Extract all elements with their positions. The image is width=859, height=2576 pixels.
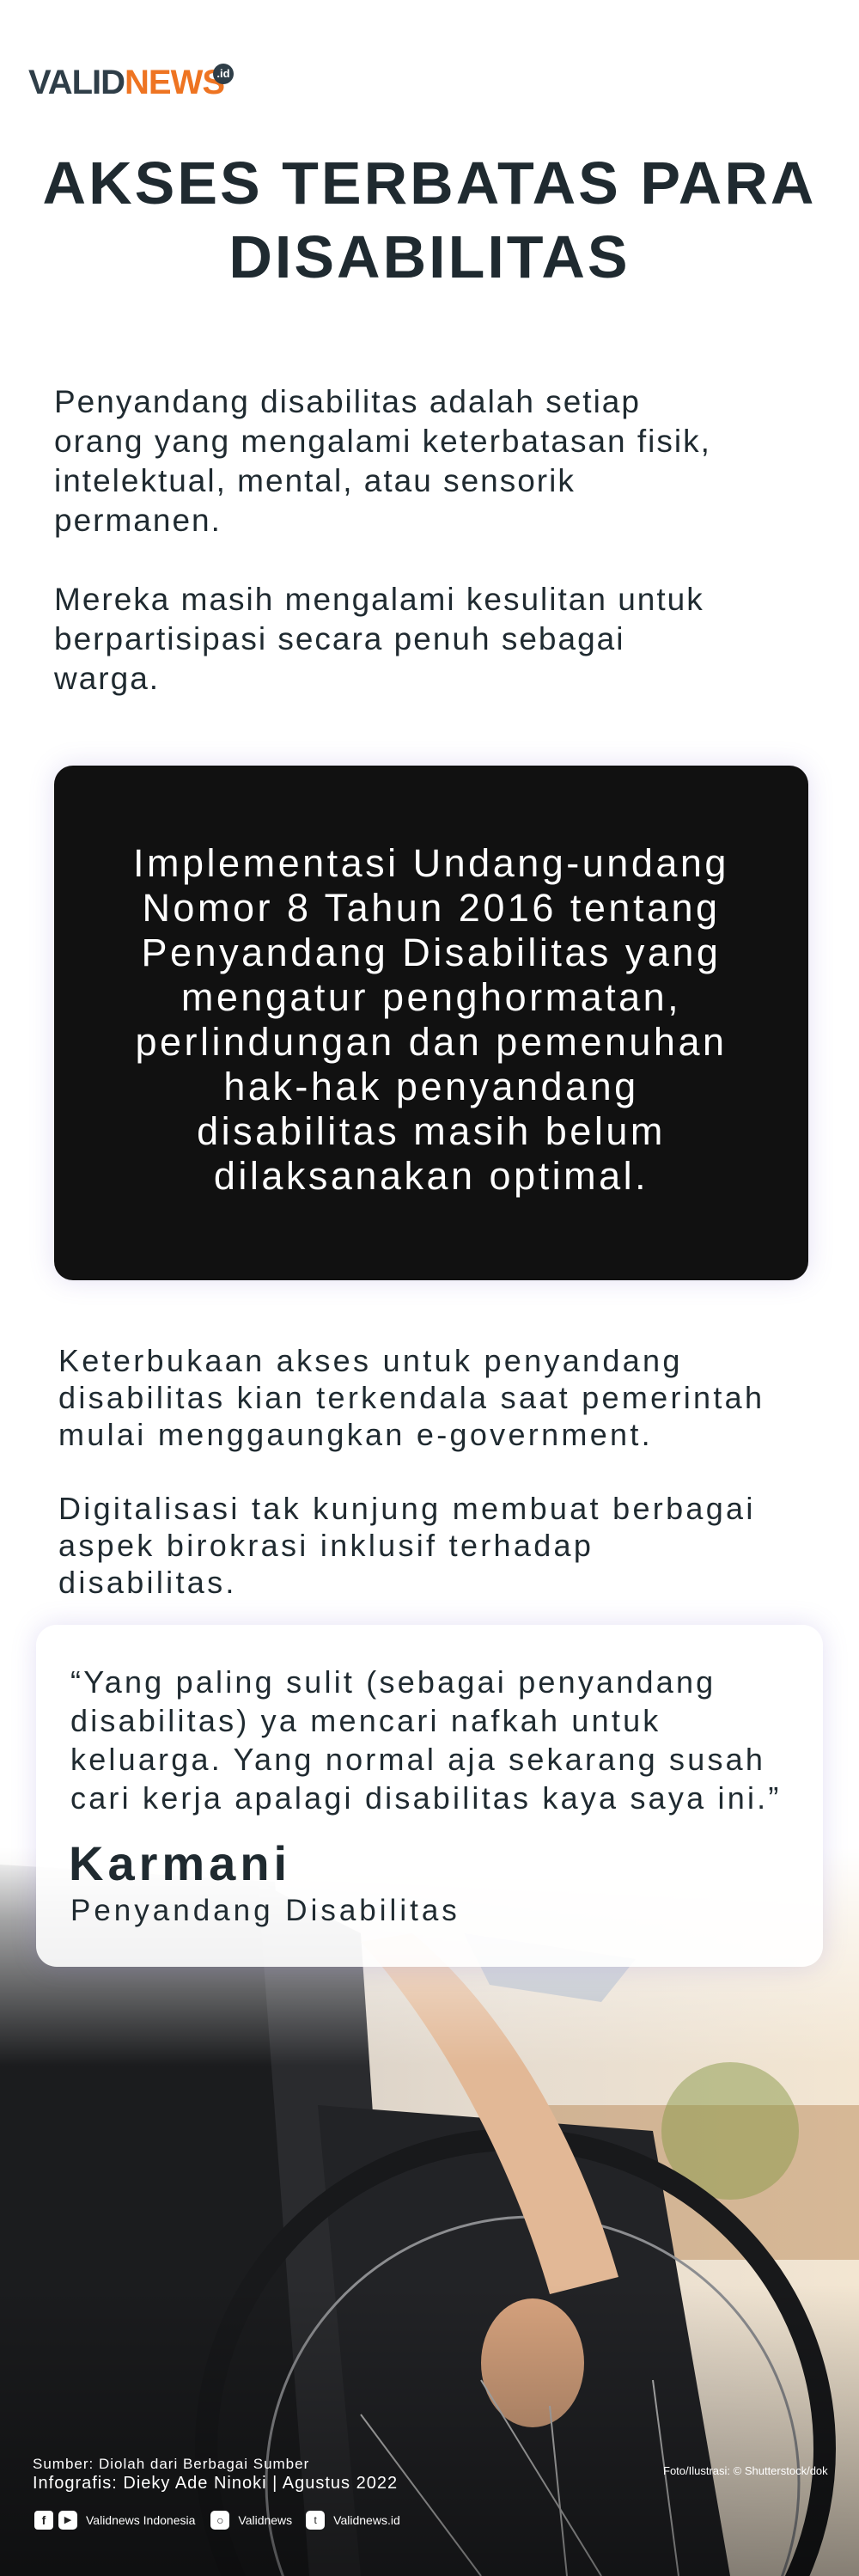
- title: [43, 150, 816, 290]
- black box: law: disabilitas masih belum: [197, 1109, 666, 1153]
- black box: law: dilaksanakan optimal.: [214, 1154, 649, 1198]
- text: e-government: Digitalisasi tak kunjung membuat berbagai: [58, 1491, 756, 1526]
- quote text: cari kerja apalagi disabilitas kaya saya ini.”: [70, 1780, 782, 1816]
- photo credit: Foto/Ilustrasi: © Shutterstock/dok: [663, 2464, 828, 2477]
- footer source: [33, 2456, 398, 2493]
- intro text: [54, 384, 711, 696]
- intro text: intelektual, mental, atau sensorik: [54, 463, 576, 498]
- intro text: Penyandang disabilitas adalah setiap: [54, 384, 641, 419]
- social icons: ○: [216, 2513, 224, 2527]
- text: e-government: Keterbukaan akses untuk penyandang: [58, 1343, 683, 1378]
- title: DISABILITAS: [228, 223, 631, 290]
- title: AKSES TERBATAS PARA: [43, 150, 816, 217]
- social icons: [34, 2511, 400, 2530]
- text: e-government: disabilitas kian terkendala saat pemerintah: [58, 1380, 765, 1415]
- black box: law: Nomor 8 Tahun 2016 tentang: [142, 886, 721, 930]
- social icons: Validnews Indonesia: [86, 2513, 195, 2527]
- social icons: Validnews: [238, 2513, 292, 2527]
- speaker role: Penyandang Disabilitas: [70, 1894, 460, 1927]
- black box: law: [54, 766, 808, 1280]
- footer source: Sumber: Diolah dari Berbagai Sumber: [33, 2456, 309, 2472]
- intro text: berpartisipasi secara penuh sebagai: [54, 621, 624, 656]
- social icons: ▶: [64, 2515, 71, 2525]
- black box: law: perlindungan dan pemenuhan: [135, 1020, 727, 1064]
- social icons: Validnews.id: [333, 2513, 400, 2527]
- logo: VALIDNEWS: [28, 64, 224, 101]
- text: e-government: [58, 1343, 765, 1600]
- black box: law: mengatur penghormatan,: [181, 975, 681, 1019]
- quote text: keluarga. Yang normal aja sekarang susah: [70, 1742, 765, 1777]
- social icons: f: [42, 2513, 46, 2527]
- logo: .id: [216, 67, 230, 80]
- black box: law: Implementasi Undang-undang: [133, 841, 729, 885]
- quote text: “Yang paling sulit (sebagai penyandang: [70, 1664, 716, 1700]
- text: e-government: aspek birokrasi inklusif terhadap: [58, 1528, 594, 1563]
- black box: law: hak-hak penyandang: [223, 1065, 639, 1108]
- quote card: [36, 1625, 823, 1967]
- social icons: t: [314, 2514, 317, 2526]
- background photo: wheelchair: [0, 1865, 859, 2576]
- intro text: warga.: [54, 661, 160, 696]
- text: e-government: mulai menggaungkan e-government.: [58, 1417, 653, 1452]
- black box: law: Penyandang Disabilitas yang: [142, 931, 721, 974]
- footer source: Infografis: Dieky Ade Ninoki | Agustus 2022: [33, 2474, 398, 2493]
- quote text: disabilitas) ya mencari nafkah untuk: [70, 1703, 661, 1738]
- speaker name: Karmani: [69, 1836, 291, 1890]
- text: e-government: disabilitas.: [58, 1565, 237, 1600]
- intro text: orang yang mengalami keterbatasan fisik,: [54, 424, 711, 459]
- intro text: Mereka masih mengalami kesulitan untuk: [54, 582, 704, 617]
- intro text: permanen.: [54, 503, 222, 538]
- quote text: [70, 1664, 782, 1816]
